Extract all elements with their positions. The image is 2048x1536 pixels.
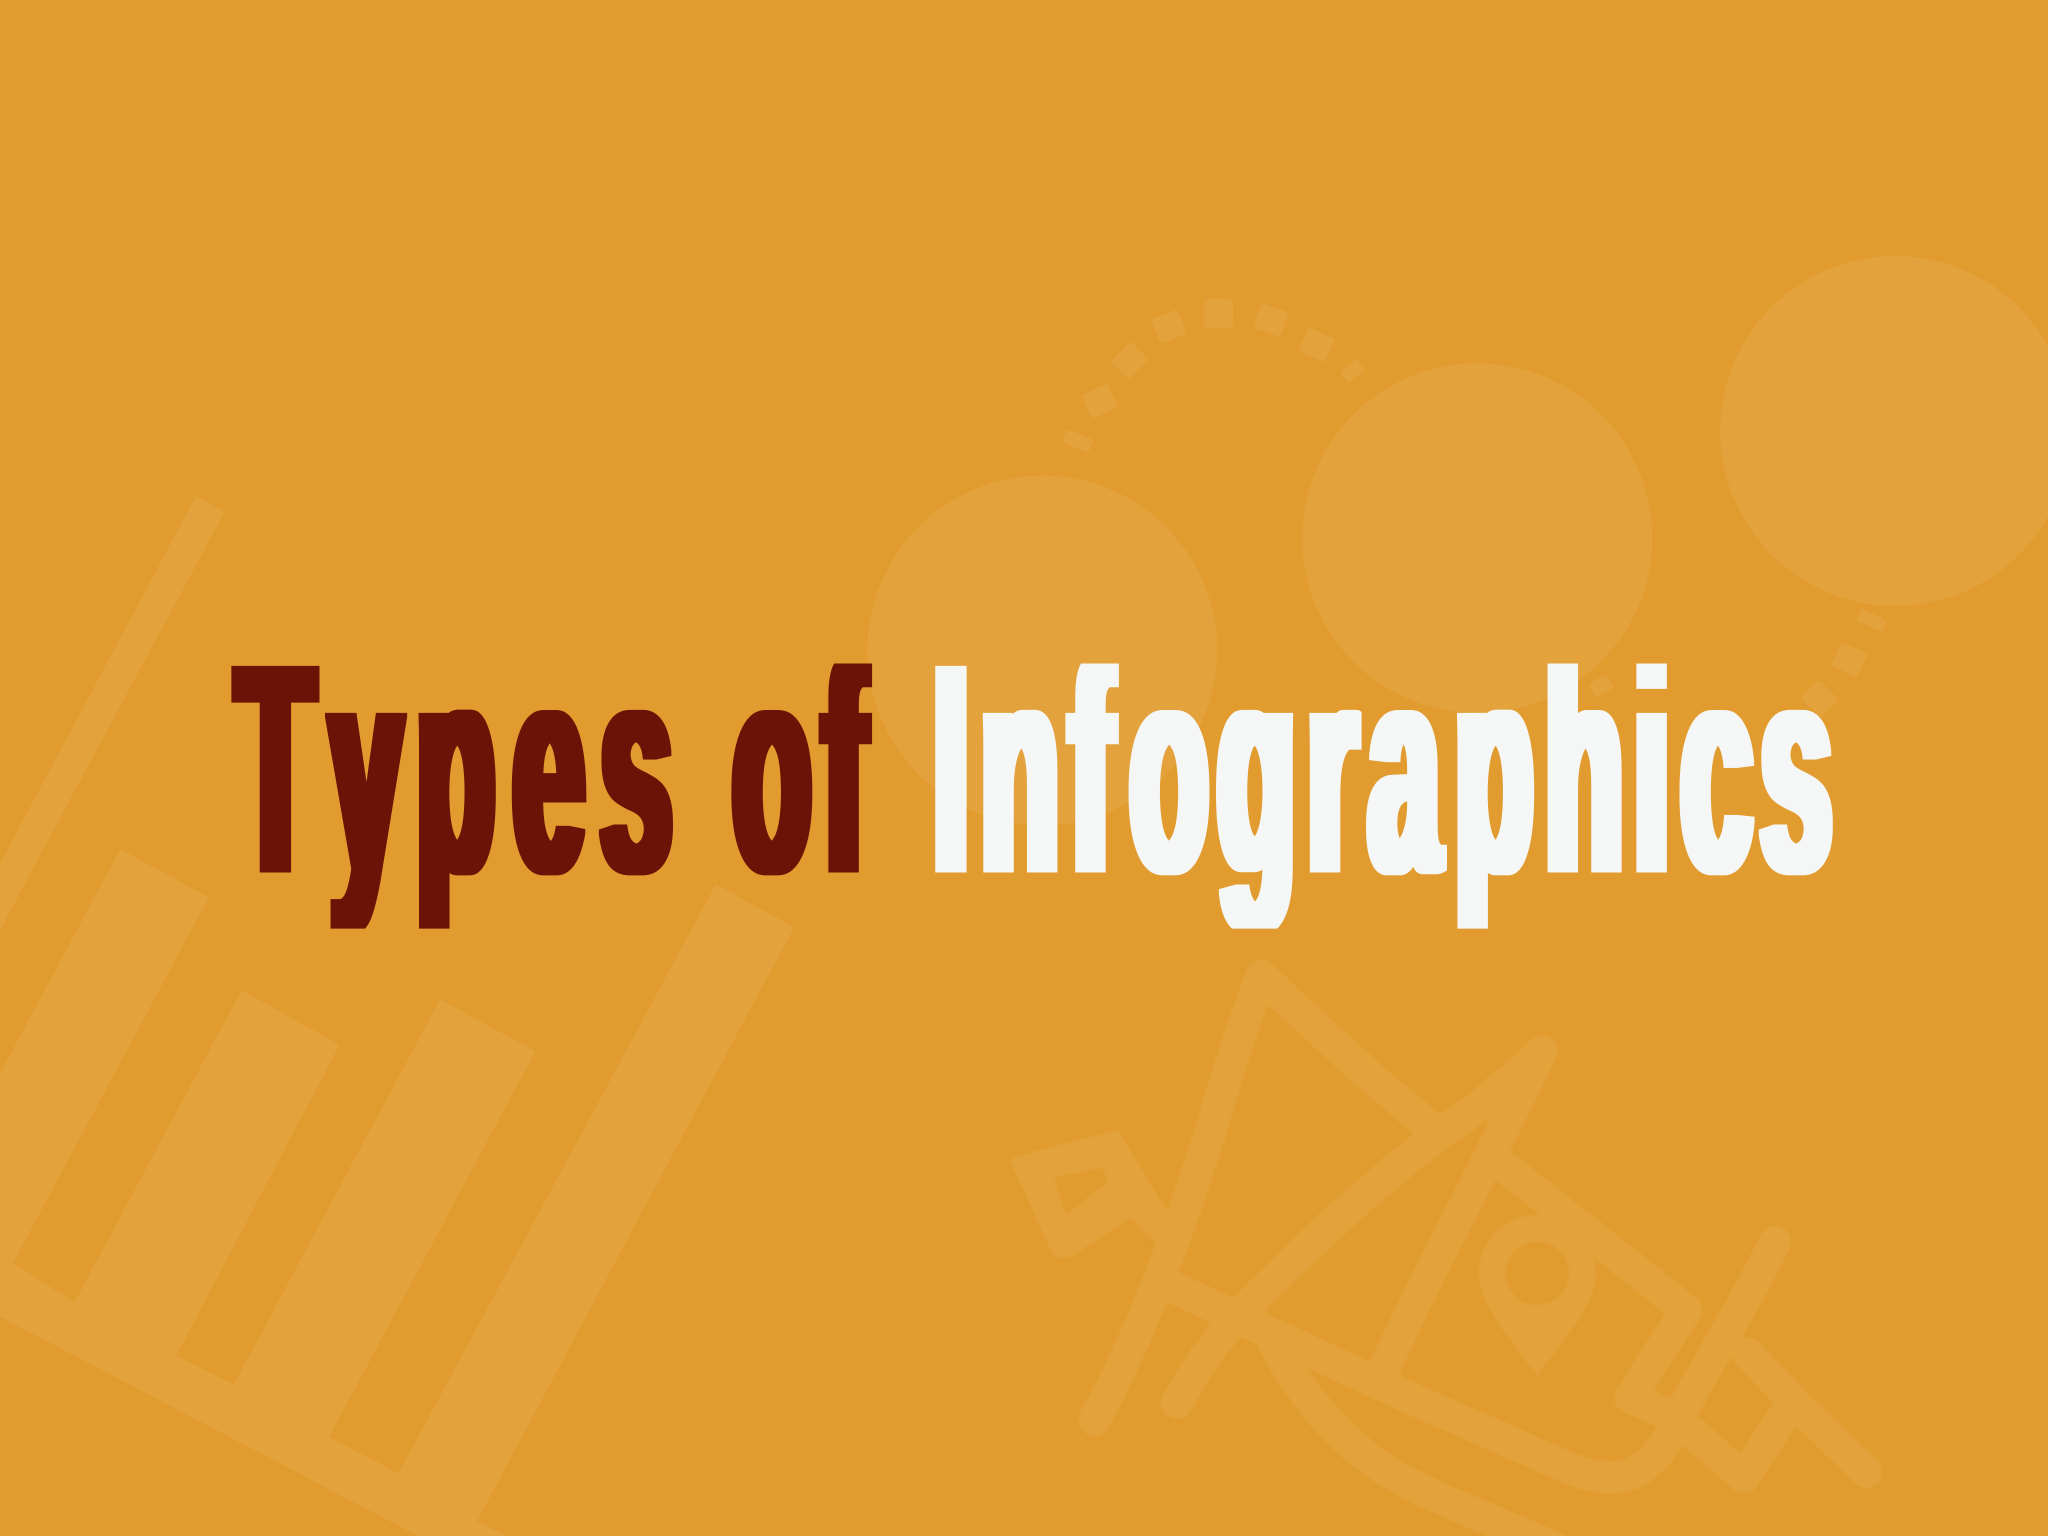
circle left (867, 475, 1217, 825)
map right fold (1501, 1164, 1686, 1420)
circle middle (1302, 363, 1652, 713)
chart axis (0, 496, 225, 930)
map right leg (1748, 1353, 1866, 1472)
map bottom curve (1273, 1343, 1567, 1536)
map corner (1693, 1417, 1783, 1477)
map outline (1095, 976, 1541, 1420)
map pin (1479, 1215, 1596, 1377)
background motif: bar chart (0, 496, 794, 1536)
flag (1012, 1132, 1170, 1256)
map lower edge (1172, 1242, 1775, 1477)
background motif: folded map with pin (1012, 976, 1866, 1536)
background motif: circles and dashed arcs (867, 256, 2048, 825)
circle right (1720, 256, 2048, 606)
chart bars and baseline (0, 849, 794, 1536)
title: Types of Infographics (236, 606, 1832, 934)
map fold (1177, 1131, 1443, 1403)
dashed arc upper (1062, 299, 1366, 453)
dashed arc right (1588, 608, 1887, 718)
